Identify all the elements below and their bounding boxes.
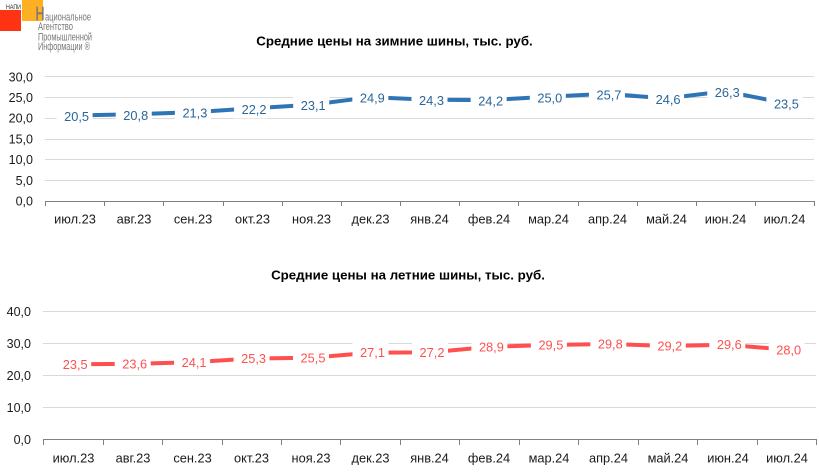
winter x axis labels: дек.23 <box>352 212 389 226</box>
summer y axis labels: 30,0 <box>7 337 31 351</box>
summer data labels: 28,9 <box>479 339 504 354</box>
winter x axis labels: окт.23 <box>235 212 270 226</box>
winter y axis labels: 0,0 <box>16 194 33 208</box>
logo: НАПИ <box>6 5 21 11</box>
winter data labels: 20,5 <box>64 109 89 124</box>
winter x axis labels: июл.23 <box>54 212 96 226</box>
winter y axis labels <box>9 70 33 208</box>
winter x axis labels: сен.23 <box>174 212 212 226</box>
summer data labels: 25,5 <box>301 350 325 365</box>
summer price line <box>73 344 787 364</box>
winter y axis labels: 25,0 <box>9 91 33 105</box>
summer data labels: 29,2 <box>657 338 682 354</box>
summer data labels: 27,2 <box>420 345 444 360</box>
summer data labels: 29,8 <box>598 336 623 352</box>
winter y axis labels: 10,0 <box>9 153 33 167</box>
summer x axis labels: июл.23 <box>53 450 94 466</box>
summer x axis labels: янв.24 <box>410 450 449 466</box>
winter x axis labels: ноя.23 <box>292 212 331 226</box>
winter label backgrounds <box>57 81 802 126</box>
summer x axis labels: окт.23 <box>234 450 269 466</box>
chart: winter tire prices <box>9 70 814 226</box>
summer data labels: 24,1 <box>182 355 207 370</box>
summer data labels: 28,0 <box>776 342 801 357</box>
winter data labels: 25,7 <box>596 87 621 102</box>
summer label backgrounds <box>55 334 805 374</box>
summer data labels: 23,6 <box>122 356 147 371</box>
winter data labels: 25,0 <box>537 90 562 105</box>
summer x axis labels: июл.24 <box>766 450 808 466</box>
summer data labels: 29,5 <box>538 338 563 352</box>
winter data labels <box>64 85 799 124</box>
winter data labels: 20,8 <box>123 108 148 123</box>
summer x axis labels: дек.23 <box>352 450 389 466</box>
summer data labels: 27,1 <box>360 345 385 360</box>
summer x axis labels: июн.24 <box>707 450 749 466</box>
winter y axis labels: 5,0 <box>16 174 33 188</box>
summer x axis labels: мар.24 <box>529 450 569 466</box>
summer y axis labels: 20,0 <box>7 369 31 383</box>
logo: ациональное <box>45 12 91 24</box>
summer x axis labels: фев.24 <box>468 450 510 466</box>
winter data labels: 24,2 <box>478 94 503 109</box>
winter price line <box>75 91 784 116</box>
summer data labels <box>63 336 801 372</box>
winter data labels: 24,6 <box>656 92 681 107</box>
winter data labels: 23,5 <box>774 96 799 112</box>
winter y axis labels: 20,0 <box>9 112 33 126</box>
summer y axis labels: 40,0 <box>7 305 31 319</box>
winter x axis labels: июл.24 <box>764 212 805 226</box>
winter data labels: 26,3 <box>715 85 740 100</box>
summer x axis labels: апр.24 <box>589 450 628 466</box>
logo <box>0 0 92 53</box>
logo: Агентство <box>38 21 73 33</box>
winter x axis labels: янв.24 <box>410 212 449 226</box>
summer x axis labels: сен.23 <box>173 450 212 466</box>
winter y axis labels: 30,0 <box>9 70 33 84</box>
summer data labels: 25,3 <box>241 351 266 366</box>
winter x axis labels: апр.24 <box>588 212 627 226</box>
summer data labels: 29,6 <box>717 337 742 352</box>
logo: Промышленной <box>38 32 92 44</box>
title: winter tires: Средние цены на зимние шины, тыс. руб. <box>256 34 533 48</box>
winter data labels: 21,3 <box>182 106 207 121</box>
chart: summer tire prices <box>7 305 816 466</box>
title: summer tires: Средние цены на летние шины, тыс. руб. <box>271 268 545 282</box>
logo: Информации ® <box>38 41 90 53</box>
winter x axis labels: мар.24 <box>528 212 569 226</box>
winter data labels: 23,1 <box>301 98 326 113</box>
summer x axis labels: май.24 <box>648 450 688 466</box>
summer y axis labels: 10,0 <box>7 401 31 415</box>
summer x axis labels: авг.23 <box>116 450 150 466</box>
summer x axis labels <box>53 450 808 466</box>
winter x axis labels: июн.24 <box>705 212 746 226</box>
summer y axis labels: 0,0 <box>14 433 31 447</box>
winter data labels: 22,2 <box>242 102 267 117</box>
logo: Н <box>36 3 44 24</box>
winter data labels: 24,3 <box>419 93 444 108</box>
winter x axis labels: фев.24 <box>468 212 510 226</box>
summer data labels: 23,5 <box>63 357 88 372</box>
winter x axis labels: авг.23 <box>117 212 151 226</box>
winter x axis labels <box>54 212 805 226</box>
winter data labels: 24,9 <box>360 91 385 106</box>
summer y axis labels <box>7 305 31 447</box>
summer x axis labels: ноя.23 <box>292 450 330 466</box>
winter x axis labels: май.24 <box>646 212 687 226</box>
winter y axis labels: 15,0 <box>9 132 33 146</box>
